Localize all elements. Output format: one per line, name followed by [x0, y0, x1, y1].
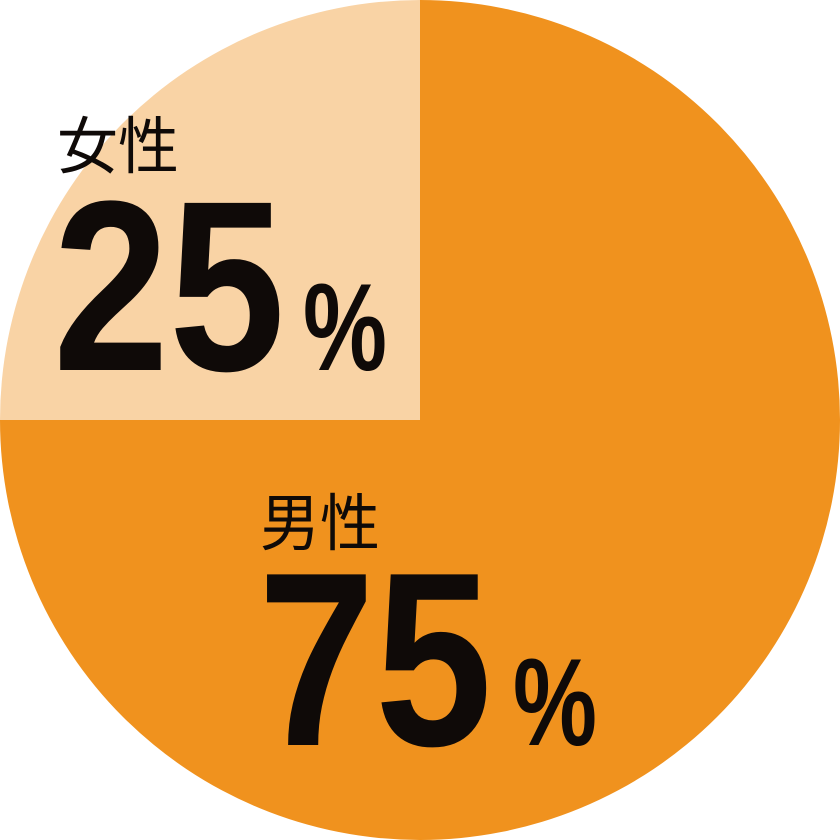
- label: female: %: [303, 259, 387, 397]
- slice: female 25%: [0, 0, 420, 420]
- label: male: %: [513, 634, 597, 772]
- label: male: 75: [258, 520, 492, 798]
- label: male: 男性: [260, 490, 380, 559]
- label: female: 女性: [57, 113, 179, 182]
- label: female: 25: [53, 151, 285, 422]
